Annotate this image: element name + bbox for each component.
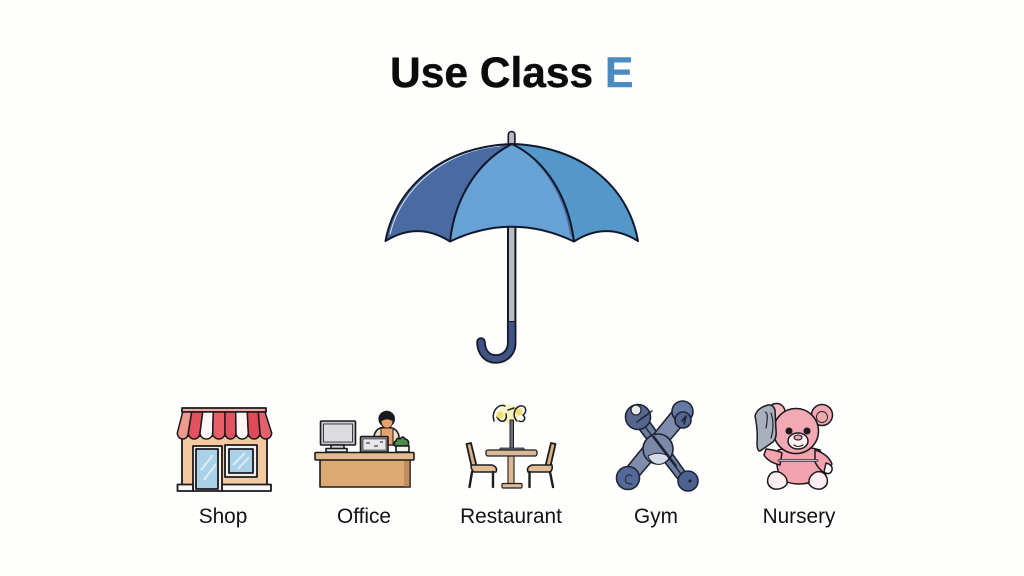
label: Restaurant: Restaurant xyxy=(460,505,562,528)
icon: restaurant xyxy=(466,404,556,488)
label: Shop: Shop xyxy=(199,505,247,528)
label: Nursery: Nursery xyxy=(763,505,836,528)
icon: umbrella xyxy=(386,132,638,359)
icon: nursery teddy bear xyxy=(755,404,832,489)
icon: gym dumbbells xyxy=(616,401,698,491)
label: Gym: Gym xyxy=(634,505,678,528)
icon: shop xyxy=(177,408,272,491)
title: Use Class E xyxy=(390,50,633,97)
label: Office: Office xyxy=(337,505,391,528)
icon: office xyxy=(315,412,414,487)
